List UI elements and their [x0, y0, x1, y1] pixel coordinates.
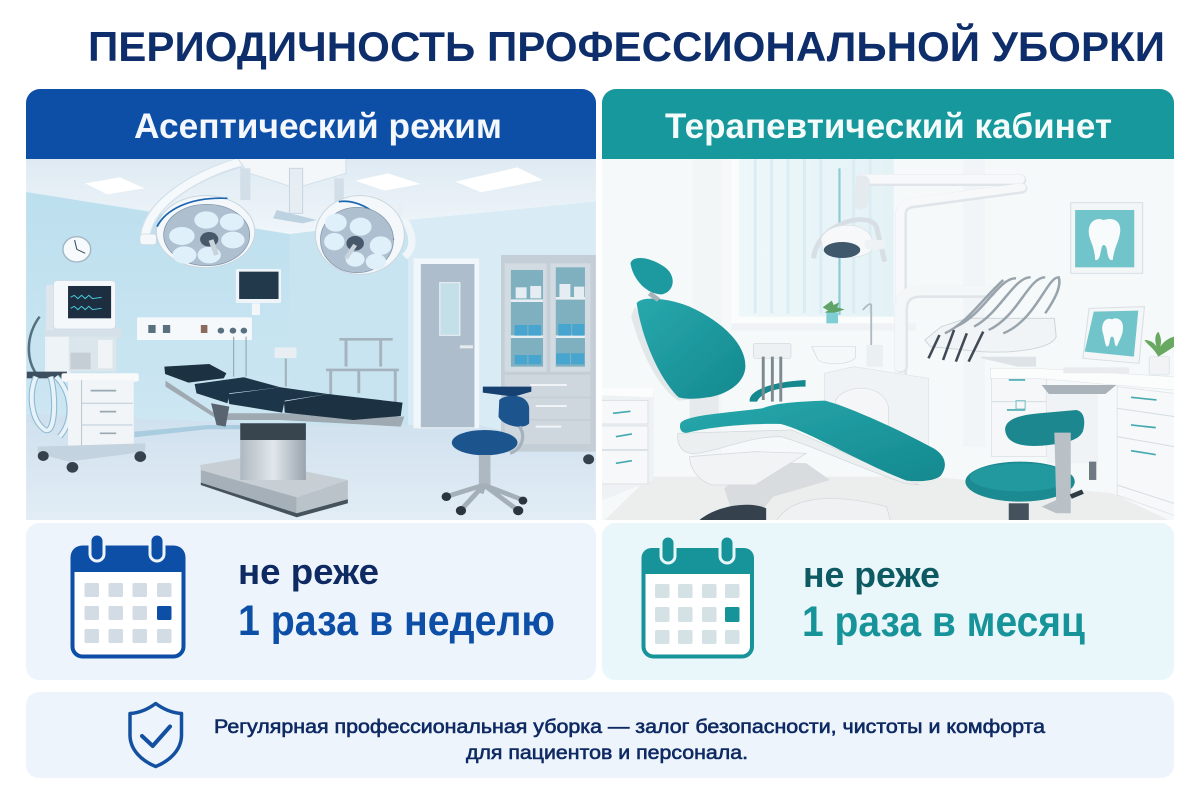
icon: shield with check	[130, 704, 182, 766]
door	[414, 258, 479, 428]
dental stool	[965, 410, 1084, 527]
panel: aseptic header: Асептический режим	[134, 107, 502, 146]
instrument tray	[925, 277, 1059, 367]
dental arms	[861, 179, 1022, 373]
side table	[275, 339, 399, 407]
clock	[63, 237, 91, 262]
text: footer line 2: для пациентов и персонала.	[466, 742, 748, 764]
anesthesia machine	[27, 281, 146, 473]
wall picture	[1071, 203, 1143, 273]
gas panel	[137, 317, 252, 377]
panel: therapy header	[602, 89, 1174, 159]
panel: aseptic frequency	[26, 523, 596, 680]
basin unit	[812, 304, 928, 447]
photo: operating room	[18, 153, 605, 530]
text: not less than: не реже	[803, 554, 940, 595]
panel: therapy frequency	[602, 523, 1174, 680]
left drawers	[602, 400, 648, 484]
stool	[442, 387, 531, 515]
text: not less than: не реже	[238, 551, 379, 592]
text: footer line 1: Регулярная профессиональная уборка — залог безопасности, чистоты и комфорта	[214, 716, 1045, 738]
dental chair	[630, 258, 945, 527]
cabinet	[501, 255, 596, 464]
wall monitor	[236, 269, 281, 315]
icon: calendar	[71, 534, 185, 656]
photo: dental office	[595, 153, 1182, 530]
surgical lights	[140, 157, 412, 274]
panel: footer note	[26, 692, 1174, 778]
panel: aseptic header	[26, 89, 596, 159]
dental lamp	[814, 220, 885, 262]
icon: calendar	[642, 536, 754, 656]
text: once a week: 1 раза в неделю	[238, 597, 555, 645]
window	[739, 159, 894, 324]
text: once a month: 1 раза в месяц	[802, 598, 1086, 646]
operating table	[164, 364, 404, 517]
title: ПЕРИОДИЧНОСТЬ ПРОФЕССИОНАЛЬНОЙ УБОРКИ	[88, 22, 1165, 70]
panel: therapy header: Терапевтический кабинет	[665, 107, 1112, 146]
desk and monitor	[991, 307, 1182, 518]
